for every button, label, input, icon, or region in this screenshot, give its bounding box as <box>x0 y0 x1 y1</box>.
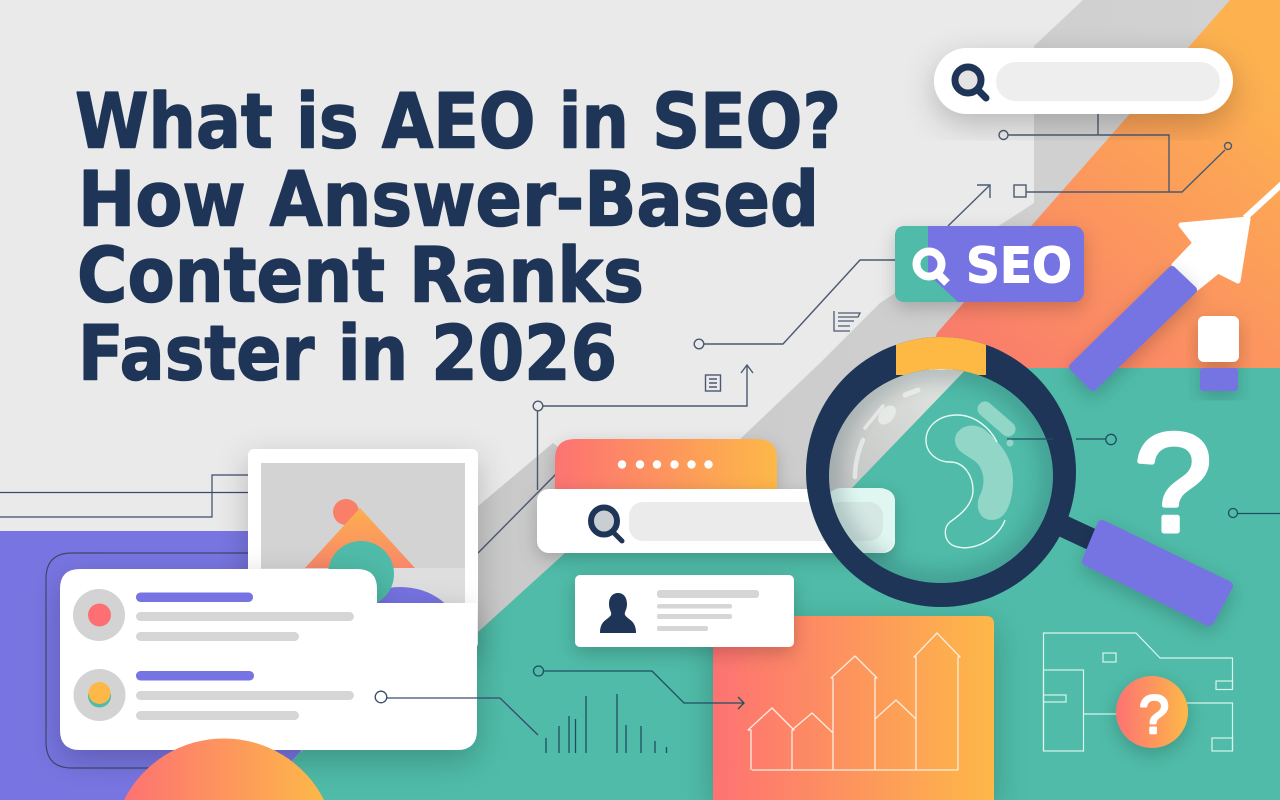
icon: magnifier <box>955 67 986 98</box>
row 2 avatar <box>74 669 126 721</box>
SEO label: SEO <box>966 238 1072 294</box>
arrow chart outline <box>748 633 960 770</box>
connector and icon above search card <box>478 365 753 553</box>
teal panel <box>258 368 1280 800</box>
title line 3: Content Ranks <box>77 230 644 320</box>
arrow tail line <box>1245 184 1280 218</box>
row 2 lines <box>136 671 354 720</box>
small purple block <box>1200 368 1238 391</box>
icon: magnifier <box>591 508 622 541</box>
growth arrow <box>1073 184 1280 387</box>
question badge <box>1116 676 1188 748</box>
yellow ring segment <box>896 337 986 375</box>
handle connector <box>1050 520 1095 541</box>
question mark: ? <box>1134 404 1212 561</box>
arrow shaft <box>1073 270 1193 387</box>
small white block <box>1198 316 1239 362</box>
profile lines <box>657 590 759 631</box>
coral circle <box>333 499 359 525</box>
title line 2: How Answer-Based <box>78 154 819 244</box>
orange triangle <box>305 508 415 568</box>
list card <box>60 569 477 750</box>
row 1 avatar <box>73 589 125 641</box>
lens callout line <box>1007 434 1116 445</box>
top search bar <box>934 48 1233 114</box>
search input <box>996 62 1220 101</box>
arrow head <box>1174 219 1248 288</box>
search input <box>629 502 883 541</box>
grey diagonal band <box>477 0 1240 640</box>
purple hill <box>377 587 444 603</box>
connector network top right <box>948 110 1232 226</box>
lens callout dot <box>1006 440 1014 446</box>
lens ring <box>806 337 1076 607</box>
bar ticks <box>546 694 666 753</box>
profile card <box>575 575 794 647</box>
lens outline shape <box>926 415 1005 548</box>
image card <box>248 449 478 677</box>
connector right edge <box>1228 508 1280 518</box>
title line 4: Faster in 2026 <box>78 308 617 398</box>
handle grip <box>1087 525 1228 621</box>
dots <box>618 460 713 469</box>
magnifying glass <box>806 337 1228 621</box>
circuit lines left <box>0 475 250 768</box>
search card <box>537 489 895 553</box>
connector to SEO badge <box>694 260 895 349</box>
connector from list card <box>375 691 538 735</box>
icon: person <box>600 593 636 633</box>
question mark label: ? <box>1139 685 1169 745</box>
chart panel <box>713 616 994 800</box>
icon: list lines <box>834 311 860 331</box>
lens interior <box>826 358 1053 583</box>
orange tab card <box>555 439 777 490</box>
lens highlights <box>855 390 918 477</box>
connector into chart panel <box>534 666 744 709</box>
SEO badge <box>895 226 1084 302</box>
title <box>75 76 841 398</box>
title line 1: What is AEO in SEO? <box>75 76 841 166</box>
row 1 lines <box>136 592 354 641</box>
floor plan line art <box>1044 633 1232 751</box>
badge teal corner <box>895 226 958 302</box>
teal circle <box>328 541 394 607</box>
purple panel <box>0 531 330 800</box>
gradient semicircle <box>124 738 324 800</box>
image placeholder <box>261 463 465 603</box>
icon: magnifier <box>916 252 947 283</box>
orange diagonal panel <box>925 0 1280 368</box>
lens blobs <box>955 409 1013 520</box>
